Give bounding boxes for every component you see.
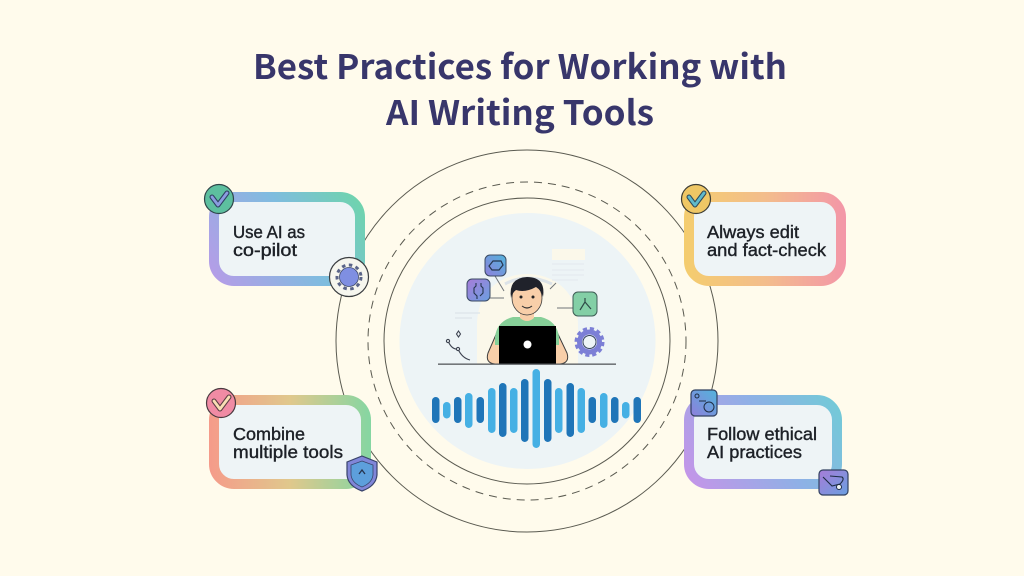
card text	[707, 424, 817, 462]
card text: Follow ethical	[707, 424, 817, 444]
panel: follow ethical AI practices	[689, 390, 848, 495]
person at laptop	[487, 277, 568, 364]
icon: gear badge	[330, 258, 368, 296]
eyes and smile	[521, 296, 533, 298]
waveform	[432, 369, 641, 448]
central disc	[400, 213, 656, 469]
card text: Combine	[233, 424, 305, 444]
card text	[233, 424, 343, 462]
card text: co-pilot	[233, 240, 297, 260]
icon: top tile	[691, 390, 717, 416]
card text	[233, 222, 305, 260]
cream arch behind person	[477, 274, 578, 364]
icon: bottom tile	[819, 470, 848, 495]
card text: multiple tools	[233, 442, 343, 462]
icon: check badge	[204, 184, 234, 214]
icon: check badge	[206, 388, 236, 418]
panel: combine multiple tools	[206, 388, 377, 491]
title: Best Practices for Working with	[253, 40, 787, 89]
card text	[707, 222, 826, 260]
neck	[520, 308, 534, 321]
icon: plug tile	[467, 279, 490, 301]
face	[512, 281, 542, 315]
title	[253, 40, 787, 135]
arms	[487, 330, 505, 364]
icon: check badge	[682, 184, 710, 214]
connector lines	[489, 276, 573, 308]
icon: squiggle	[446, 331, 470, 360]
card text: Use AI as	[233, 222, 305, 242]
faint document	[455, 249, 585, 318]
icon: green tile	[573, 292, 597, 316]
laptop logo	[524, 340, 532, 348]
card text: Always edit	[707, 222, 799, 242]
shirt	[495, 317, 559, 345]
title: AI Writing Tools	[385, 86, 654, 135]
icon: shield	[347, 456, 377, 491]
hair	[511, 277, 543, 298]
laptop	[499, 326, 556, 364]
panel: always edit and fact-check	[682, 184, 841, 281]
panel: use AI as co-pilot	[204, 184, 368, 296]
icon: blue tile	[485, 255, 506, 276]
card text: AI practices	[707, 442, 802, 462]
table line	[438, 364, 616, 365]
concentric circles	[336, 150, 718, 532]
card text: and fact-check	[707, 240, 826, 260]
icon: gear	[576, 329, 602, 355]
